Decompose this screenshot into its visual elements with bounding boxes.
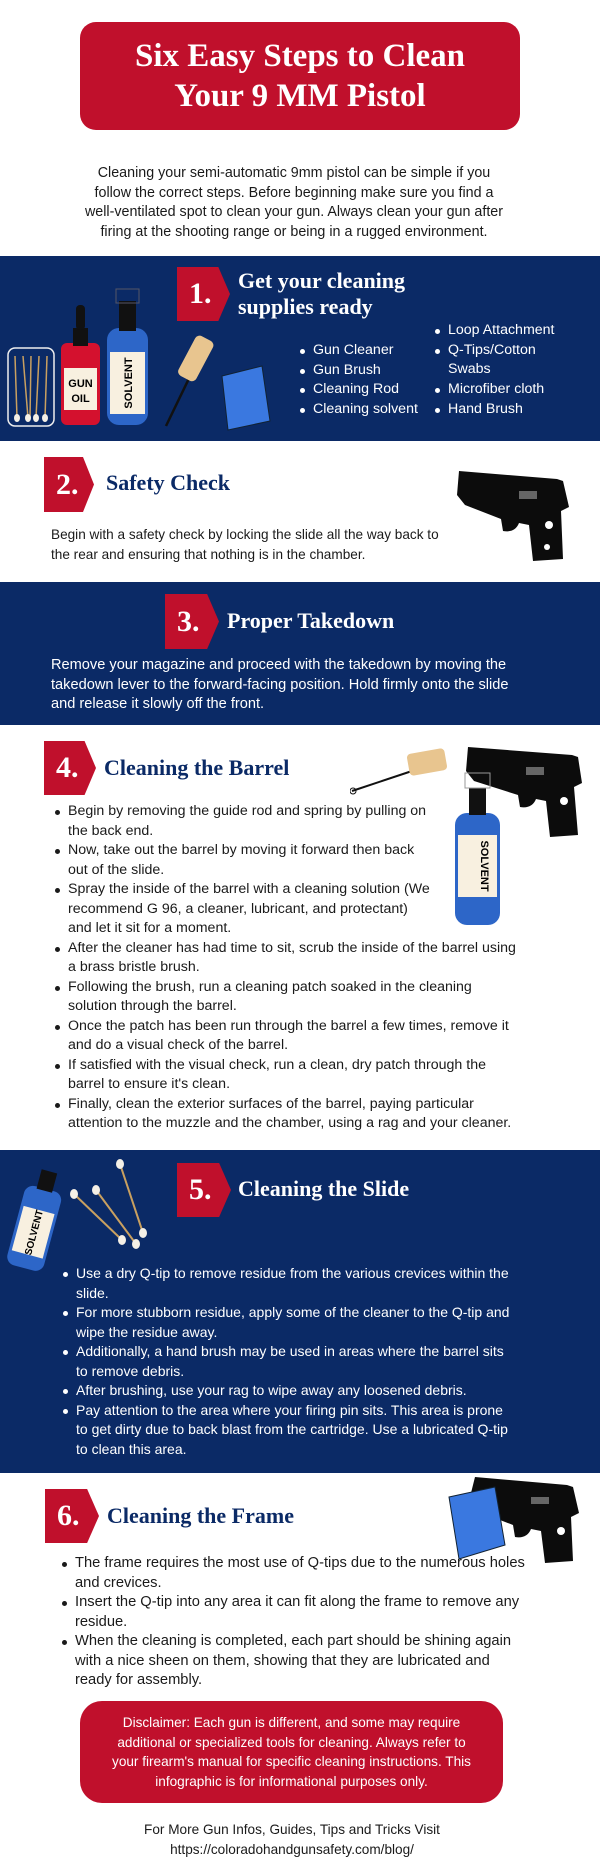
list: barrel steps: the back end. bbox=[68, 822, 153, 838]
list: frame steps bbox=[62, 1555, 525, 1688]
heading 3: Proper Takedown bbox=[227, 608, 394, 633]
list: barrel steps: recommend G 96, a cleaner, lubricant, and protectant) bbox=[68, 900, 408, 916]
text 3: takedown lever to the forward-facing position. Hold firmly onto the slide bbox=[51, 676, 509, 692]
intro text bbox=[85, 165, 503, 240]
list: supplies col 2 bbox=[435, 322, 554, 417]
list: supplies col 1: Cleaning solvent bbox=[313, 401, 418, 417]
list: supplies col 1 bbox=[300, 342, 418, 417]
panel: step 3 takedown bbox=[0, 582, 600, 725]
panel: step 2 safety check bbox=[44, 457, 569, 562]
list: frame steps: ready for assembly. bbox=[75, 1672, 202, 1688]
list: barrel steps: barrel to ensure it's clean. bbox=[68, 1076, 230, 1092]
list: frame steps: The frame requires the most use of Q-tips due to the numerous holes bbox=[75, 1555, 525, 1571]
list: barrel steps: Begin by removing the guide rod and spring by pulling on bbox=[68, 803, 426, 819]
list: supplies col 1: Cleaning Rod bbox=[313, 381, 399, 397]
intro text: well-ventilated spot to clean your gun. Always clean your gun after bbox=[85, 204, 503, 220]
badge 6 bbox=[45, 1489, 99, 1543]
list: barrel steps: Once the patch has been run through the barrel a few times, remove it bbox=[68, 1018, 509, 1034]
panel: step 5 slide bbox=[0, 1150, 600, 1473]
footer: https://coloradohandgunsafety.com/blog/ bbox=[170, 1842, 414, 1856]
panel: step 4 barrel bbox=[44, 741, 582, 1131]
disclaimer callout bbox=[80, 1701, 503, 1803]
intro text: Cleaning your semi-automatic 9mm pistol can be simple if you bbox=[98, 165, 490, 181]
list: barrel steps: After the cleaner has had time to sit, scrub the inside of the barrel using bbox=[68, 940, 516, 956]
badge 6: 6. bbox=[57, 1499, 80, 1532]
badge 4: 4. bbox=[56, 751, 78, 784]
list: barrel steps: attention to the muzzle and the chamber, using a rag and your cleaner. bbox=[68, 1115, 511, 1131]
heading 4: Cleaning the Barrel bbox=[104, 755, 289, 780]
icon: solvent and q-tips bbox=[7, 1159, 147, 1271]
badge 5: 5. bbox=[189, 1173, 212, 1206]
badge 4 bbox=[44, 741, 96, 795]
title: Your 9 MM Pistol bbox=[174, 78, 426, 114]
title bbox=[80, 22, 520, 130]
list: barrel steps: Finally, clean the exterior surfaces of the barrel, paying particular bbox=[68, 1096, 474, 1112]
text 3: and release it slowly off the front. bbox=[51, 696, 264, 712]
badge 3: 3. bbox=[177, 604, 200, 638]
heading 1 bbox=[238, 268, 405, 319]
heading 1: Get your cleaning bbox=[238, 268, 405, 293]
list: supplies col 2: Swabs bbox=[448, 361, 491, 377]
badge 3 bbox=[165, 594, 219, 649]
icon: brush, pistol, solvent bbox=[350, 747, 582, 925]
list: barrel steps: Following the brush, run a cleaning patch soaked in the cleaning bbox=[68, 978, 472, 994]
icon: supplies: GUN bbox=[68, 378, 93, 390]
heading 5: Cleaning the Slide bbox=[238, 1176, 409, 1201]
text 2: the rear and ensuring that nothing is in the chamber. bbox=[51, 546, 365, 562]
list: supplies col 1: Gun Cleaner bbox=[313, 342, 393, 358]
list: frame steps: residue. bbox=[75, 1614, 127, 1630]
panel: step 6 frame bbox=[45, 1477, 579, 1688]
icon: brush, pistol, solvent: SOLVENT bbox=[478, 840, 490, 892]
list: slide steps: wipe the residue away. bbox=[76, 1324, 217, 1340]
list: barrel steps: solution through the barrel. bbox=[68, 998, 237, 1014]
intro text: firing at the shooting range or being in a rugged environment. bbox=[100, 224, 488, 240]
icon: supplies: SOLVENT bbox=[123, 357, 135, 409]
intro text: follow the correct steps. Before beginning make sure you find a bbox=[95, 184, 493, 200]
list: supplies col 1: Gun Brush bbox=[313, 362, 381, 378]
list: slide steps: After brushing, use your rag to wipe away any loosened debris. bbox=[76, 1382, 467, 1398]
list: barrel steps: and do a visual check of the barrel. bbox=[68, 1037, 288, 1053]
badge 2 bbox=[44, 457, 94, 512]
list: supplies col 2: Hand Brush bbox=[448, 401, 523, 417]
list: barrel steps bbox=[55, 803, 516, 1131]
badge 1 bbox=[177, 267, 230, 321]
list: frame steps: and crevices. bbox=[75, 1574, 162, 1590]
list: frame steps: When the cleaning is completed, each part should be shining again bbox=[75, 1633, 511, 1649]
list: barrel steps: If satisfied with the visual check, run a clean, dry patch through the bbox=[68, 1056, 486, 1072]
heading 1: supplies ready bbox=[238, 294, 373, 319]
icon: supplies: OIL bbox=[71, 393, 90, 405]
list: slide steps: For more stubborn residue, apply some of the cleaner to the Q-tip and bbox=[76, 1304, 509, 1320]
text 3 bbox=[51, 657, 509, 712]
list: slide steps: to get dirty due to back blast from the cartridge. Use a lubricated Q-tip bbox=[76, 1421, 508, 1437]
list: barrel steps: out of the slide. bbox=[68, 862, 164, 878]
list: slide steps: to clean this area. bbox=[76, 1440, 187, 1456]
list: barrel steps: and let it sit for a moment. bbox=[68, 920, 231, 936]
heading 2: Safety Check bbox=[106, 470, 230, 495]
list: supplies col 2: Loop Attachment bbox=[448, 322, 554, 338]
footer: For More Gun Infos, Guides, Tips and Tricks Visit bbox=[144, 1822, 440, 1837]
badge 5 bbox=[177, 1163, 231, 1217]
list: frame steps: Insert the Q-tip into any area it can fit along the frame to remove any bbox=[75, 1594, 519, 1610]
badge 2: 2. bbox=[56, 468, 78, 500]
list: frame steps: with a nice sheen on them, showing that they are lubricated and bbox=[75, 1652, 490, 1668]
list: slide steps bbox=[63, 1265, 509, 1456]
disclaimer callout: infographic is for informational purposes only. bbox=[155, 1774, 428, 1788]
heading 6: Cleaning the Frame bbox=[107, 1503, 294, 1528]
list: supplies col 2: Q-Tips/Cotton bbox=[448, 342, 536, 358]
list: supplies col 2: Microfiber cloth bbox=[448, 381, 544, 397]
text 2 bbox=[51, 527, 439, 562]
disclaimer callout: Disclaimer: Each gun is different, and some may require bbox=[123, 1715, 460, 1730]
icon: pistol bbox=[457, 471, 569, 561]
list: slide steps: Additionally, a hand brush may be used in areas where the barrel sits bbox=[76, 1343, 504, 1359]
list: slide steps: Pay attention to the area where your firing pin sits. This area is prone bbox=[76, 1402, 503, 1418]
list: barrel steps: Now, take out the barrel by moving it forward then back bbox=[68, 842, 414, 858]
text 2: Begin with a safety check by locking the slide all the way back to bbox=[51, 527, 439, 542]
list: barrel steps: a brass bristle brush. bbox=[68, 959, 200, 975]
footer bbox=[144, 1822, 440, 1857]
list: slide steps: to remove debris. bbox=[76, 1362, 184, 1378]
list: barrel steps: Spray the inside of the barrel with a cleaning solution (We bbox=[68, 881, 430, 897]
badge 1: 1. bbox=[189, 277, 212, 310]
title: Six Easy Steps to Clean bbox=[135, 38, 465, 74]
list: slide steps: slide. bbox=[76, 1284, 109, 1300]
icon: solvent and q-tips: SOLVENT bbox=[23, 1209, 46, 1256]
text 3: Remove your magazine and proceed with the takedown by moving the bbox=[51, 657, 506, 673]
disclaimer callout: your firearm's manual for specific cleaning instructions. This bbox=[112, 1754, 471, 1769]
list: slide steps: Use a dry Q-tip to remove residue from the various crevices within the bbox=[76, 1265, 509, 1281]
panel: step 1 supplies bbox=[0, 256, 600, 441]
icon: supplies bbox=[7, 288, 270, 431]
icon: cloth and pistol bbox=[448, 1477, 579, 1563]
disclaimer callout: additional or specialized tools for cleaning. Always refer to bbox=[117, 1734, 466, 1750]
